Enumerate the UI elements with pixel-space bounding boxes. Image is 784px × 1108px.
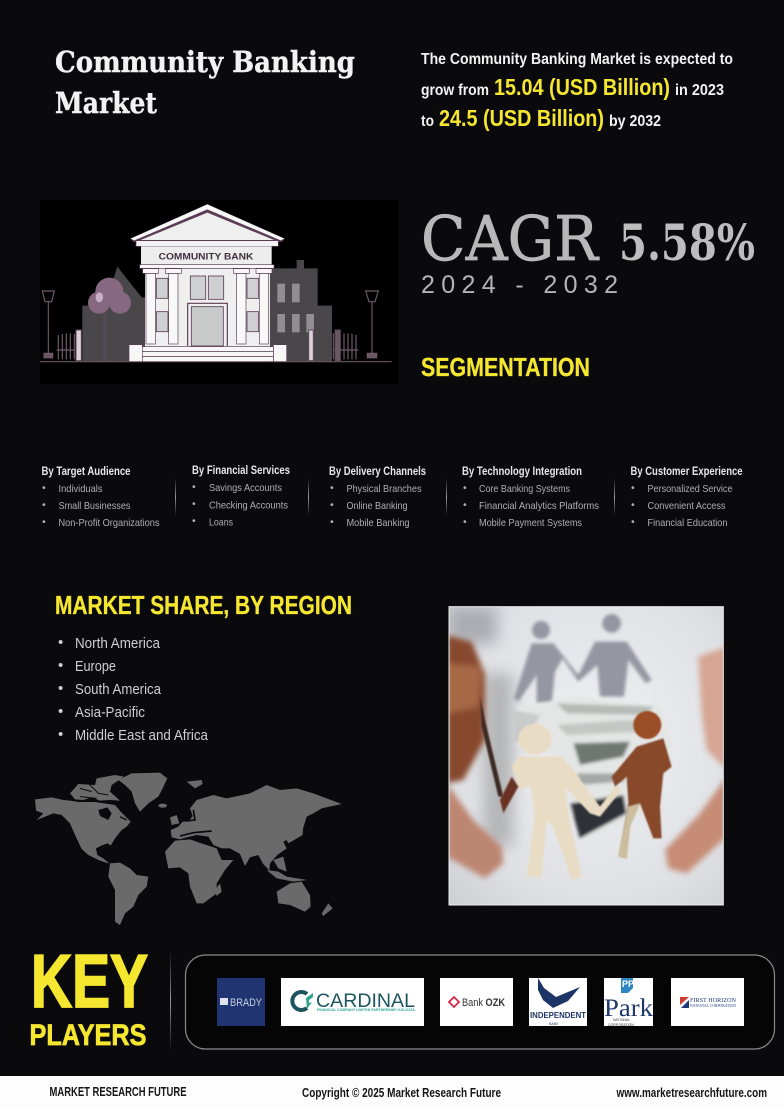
region list: •: [58, 634, 63, 651]
segment: financial services: Loans: [209, 516, 233, 528]
segment: technology integration: •: [463, 499, 467, 511]
panel: key player logos: [186, 955, 774, 1049]
segment: financial services: •: [192, 498, 196, 510]
photo: paper figures and money: [447, 607, 727, 905]
segment: delivery channels: •: [330, 482, 334, 494]
segment: customer experience: By Customer Experience: [630, 464, 743, 478]
region list: •: [58, 726, 63, 743]
left hand: [447, 635, 503, 878]
region list: [58, 634, 209, 744]
CAGR block: CAGR: [421, 202, 600, 275]
segment: target audience: Individuals: [58, 483, 102, 495]
segment: financial services: Savings Accounts: [209, 482, 282, 494]
steps: [129, 345, 287, 362]
region list: •: [58, 703, 63, 720]
segment: financial services: •: [192, 481, 196, 493]
region list: South America: [75, 681, 162, 698]
panel: bank illustration: [40, 200, 398, 384]
heading: key players: [30, 939, 148, 1052]
segment: target audience: •: [42, 516, 46, 528]
footer: MARKET RESEARCH FUTURE: [50, 1085, 186, 1099]
logo: Park National: NATIONAL: [613, 1018, 630, 1022]
segment: customer experience: •: [631, 499, 635, 511]
segment: delivery channels: By Delivery Channels: [329, 464, 426, 478]
windows and door: [156, 276, 259, 346]
CAGR block: 2024 - 2032: [421, 271, 618, 299]
region list: Middle East and Africa: [75, 727, 209, 744]
segment: target audience: Small Businesses: [58, 500, 130, 512]
cream paper figure: [512, 724, 622, 880]
footer: Copyright © 2025 Market Research Future: [302, 1086, 501, 1100]
logo: Park National: PP: [622, 979, 634, 989]
logo: Independent Bank: [529, 978, 587, 1026]
segment: financial services: Checking Accounts: [209, 500, 288, 512]
columns: [143, 269, 272, 344]
background buildings: [82, 260, 332, 362]
banknotes: [514, 699, 655, 840]
building windows: [277, 284, 314, 332]
segment: delivery channels: •: [330, 516, 334, 528]
world map: [35, 773, 342, 925]
logo: Cardinal: [281, 978, 424, 1026]
segment: delivery channels: Online Banking: [346, 500, 408, 512]
logo: Park National: Park: [604, 995, 654, 1022]
segment: delivery channels: Mobile Banking: [346, 517, 410, 529]
heading: key players: PLAYERS: [30, 1019, 146, 1052]
title: Community Banking: [55, 45, 355, 79]
logo: Park National: [604, 978, 654, 1027]
region list: •: [58, 680, 63, 697]
bank body: [129, 204, 287, 362]
bank body: COMMUNITY BANK: [159, 252, 254, 262]
segment: technology integration: Mobile Payment Systems: [479, 517, 582, 529]
brown paper figure: [500, 706, 672, 858]
logo: First Horizon: FIRST HORIZON: [690, 998, 737, 1004]
segment: technology integration: Financial Analytics Platforms: [479, 500, 599, 512]
gate posts: [76, 330, 340, 361]
segment: technology integration: Core Banking Systems: [479, 483, 570, 495]
logo: Cardinal: CARDINAL: [316, 991, 415, 1012]
logo: Bank OZK: [440, 978, 513, 1026]
segment: customer experience: Personalized Service: [648, 483, 733, 495]
heading: key players: KEY: [31, 939, 148, 1023]
market forecast text: grow from: [421, 82, 489, 99]
soft gray shading: [449, 607, 513, 847]
segment: target audience: Non-Profit Organizations: [58, 517, 160, 529]
segment: target audience: [42, 464, 160, 529]
segment: target audience: •: [42, 482, 46, 494]
market forecast text: by 2032: [609, 113, 661, 130]
gray shadow figures: [514, 614, 652, 703]
panel: segmentation columns: [42, 463, 743, 529]
region list: Europe: [75, 658, 116, 675]
logo: Independent Bank: BANK: [549, 1022, 559, 1026]
tree: [88, 278, 131, 362]
logo: Independent Bank: INDEPENDENT: [530, 1011, 586, 1020]
market forecast text: [421, 51, 733, 131]
market forecast text: to: [421, 113, 434, 130]
market forecast text: in 2023: [675, 82, 724, 99]
map lakes and channels: [80, 783, 238, 853]
region list: •: [58, 657, 63, 674]
market forecast text: 15.04 (USD Billion): [494, 74, 670, 100]
segment: customer experience: Convenient Access: [648, 500, 726, 512]
region list: North America: [75, 635, 161, 652]
logo: Cardinal: FINANCIAL COMPANY LIMITED PARTNERSHIP, KOLKATA: [317, 1008, 415, 1012]
segment: financial services: By Financial Services: [192, 463, 290, 477]
segment: financial services: •: [192, 515, 196, 527]
logo: Park National: CORPORATION: [608, 1023, 634, 1027]
market forecast text: The Community Banking Market is expected to: [421, 51, 733, 68]
segment: technology integration: •: [463, 516, 467, 528]
logo: Brady: [217, 978, 265, 1026]
segment: delivery channels: Physical Branches: [346, 483, 422, 495]
logo: Bank OZK: Bank OZK: [462, 997, 505, 1009]
logo: First Horizon: NATIONAL CORPORATION: [690, 1003, 736, 1008]
segment: technology integration: [462, 464, 599, 529]
title: [55, 45, 355, 120]
footer: [0, 1076, 784, 1108]
segment: customer experience: •: [631, 516, 635, 528]
segment: target audience: By Target Audience: [42, 464, 131, 478]
title: Market: [55, 86, 158, 120]
segment: customer experience: Financial Education: [648, 517, 728, 529]
logo: First Horizon: [671, 978, 744, 1026]
segment: customer experience: •: [631, 482, 635, 494]
segment: delivery channels: •: [330, 499, 334, 511]
right hand: [665, 647, 727, 873]
segment: target audience: •: [42, 499, 46, 511]
segment: delivery channels: [329, 464, 426, 529]
pen: [480, 697, 503, 797]
heading: market share by region: MARKET SHARE, BY REGION: [55, 590, 352, 620]
heading: segmentation: SEGMENTATION: [421, 352, 590, 382]
segment: financial services: [192, 463, 290, 528]
segment: technology integration: •: [463, 482, 467, 494]
segment: technology integration: By Technology Integration: [462, 464, 582, 478]
logo: Brady: BRADY: [230, 997, 263, 1009]
market forecast text: 24.5 (USD Billion): [439, 105, 604, 131]
CAGR block: 5.58%: [619, 213, 755, 272]
region list: Asia-Pacific: [75, 704, 145, 721]
CAGR block: [421, 202, 755, 299]
lamps and fences: [40, 291, 392, 362]
segment: customer experience: [630, 464, 743, 529]
